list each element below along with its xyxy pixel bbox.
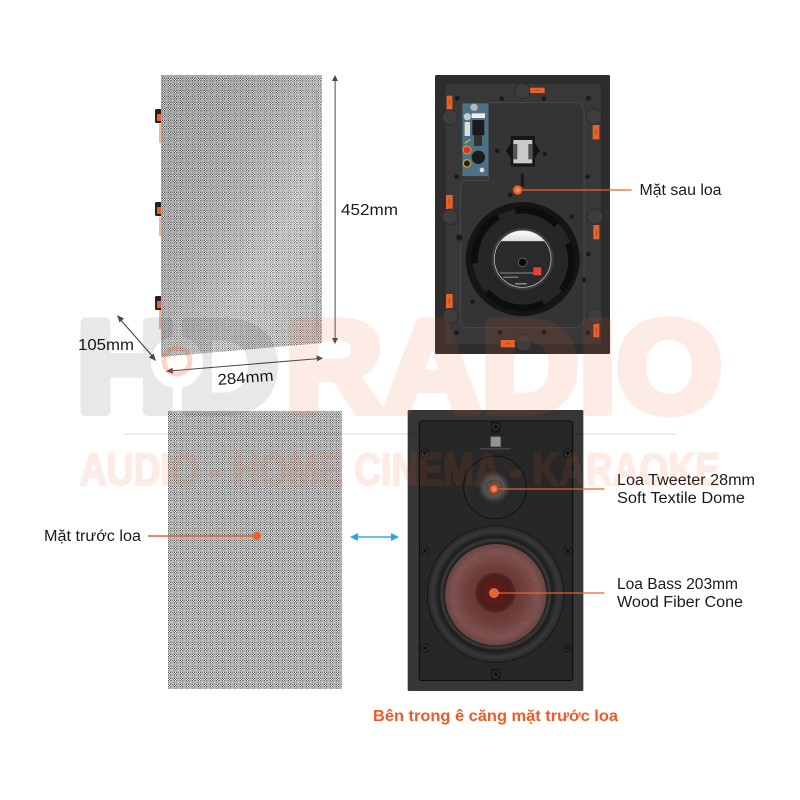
label: woofer: Loa Bass 203mm — [617, 576, 738, 593]
arrow: depth 105mm — [117, 315, 156, 361]
label: 105mm: 105mm — [78, 337, 134, 354]
label: woofer: Wood Fiber Cone — [617, 594, 743, 611]
watermark: RADIO: RADIO — [285, 294, 722, 440]
icon: woofer back — [466, 202, 580, 316]
watermark: divider — [124, 433, 676, 435]
label: tweeter: Loa Tweeter 28mm — [617, 472, 755, 489]
icon: screws — [422, 424, 570, 677]
panel: rear of speaker — [435, 75, 632, 354]
icon: brand logo — [480, 437, 511, 449]
label: front grille: Mặt trước loa — [44, 528, 141, 545]
icon: rear clamps and orange tabs — [442, 83, 603, 351]
icon: screw tabs — [421, 421, 572, 681]
panel: speaker front — [408, 410, 604, 691]
speaker grille, angled view — [161, 75, 322, 357]
watermark: HD: HD — [76, 294, 279, 440]
icon: crossover board — [462, 103, 488, 176]
icon: side clamps — [155, 109, 162, 329]
label: rear of speaker: Mặt sau loa — [640, 182, 722, 199]
label: tweeter: Soft Textile Dome — [617, 490, 745, 507]
icon: tweeter — [464, 456, 526, 519]
arrow: width 284mm — [166, 355, 323, 374]
icon: woofer — [427, 526, 564, 662]
watermark: microphone ring — [164, 348, 190, 374]
arrow: height 452mm — [332, 75, 338, 344]
icon: tweeter back — [506, 136, 540, 167]
callout marker: woofer — [490, 589, 604, 597]
arrow: grille to speaker — [350, 533, 399, 541]
panel: angled speaker with dimensions — [78, 75, 398, 389]
callout marker: rear — [513, 185, 632, 195]
label: 452mm: 452mm — [341, 202, 398, 219]
callout marker: tweeter — [490, 485, 604, 493]
watermark logo — [80, 316, 721, 486]
caption: Bên trong ê căng mặt trước loa — [373, 708, 618, 725]
panel: front grille — [148, 411, 342, 689]
callout marker: front grille — [148, 532, 261, 540]
label: 284mm: 284mm — [217, 368, 274, 389]
